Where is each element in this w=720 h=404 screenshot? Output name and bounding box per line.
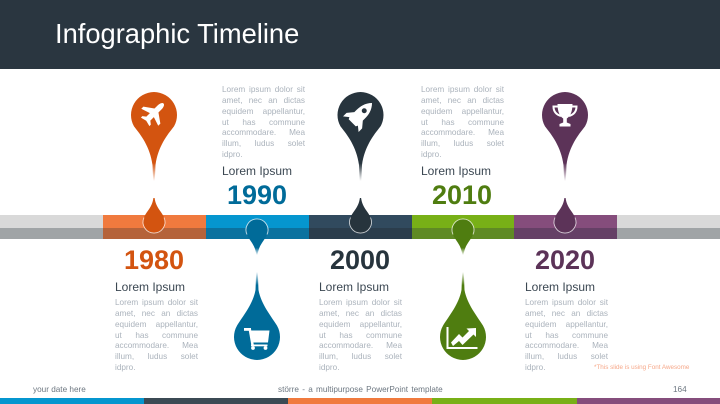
text 2010: equidem appellantur, [421, 107, 504, 116]
text 2000: illum, ludus solet [319, 352, 402, 361]
text 2010: Lorem ipsum dolor sit [421, 85, 504, 94]
text 2000: accommodare. Mea [319, 341, 402, 350]
text 2020: illum, ludus solet [525, 352, 608, 361]
icon: chart [446, 327, 478, 349]
text 1990 [222, 85, 305, 159]
header bar [0, 0, 720, 69]
footer template name: större - a multipurpose PowerPoint template [278, 385, 443, 394]
text 2010: idpro. [421, 150, 441, 159]
pin 2020: trophy [542, 92, 588, 181]
text 2010: accommodare. Mea [421, 128, 504, 137]
page number: 164 [673, 385, 687, 394]
drop 2000 on band [350, 198, 372, 233]
text 2000: amet, nec an dictas [319, 309, 402, 318]
icon: trophy [554, 104, 576, 126]
text 2010: ut has commune [421, 118, 504, 127]
heading 1990: Lorem Ipsum [222, 164, 292, 178]
text 2020: accommodare. Mea [525, 341, 608, 350]
text 2020: equidem appellantur, [525, 320, 608, 329]
pin 1990: drop with cart [234, 272, 280, 360]
year 2010: 2010 [432, 180, 492, 210]
pin 1990: small marker on band [246, 219, 268, 255]
text 1980: accommodare. Mea [115, 341, 198, 350]
year 1990: 1990 [227, 180, 287, 210]
drop 2020 on band [554, 198, 576, 233]
text 1980: idpro. [115, 363, 135, 372]
heading 2020: Lorem Ipsum [525, 280, 595, 294]
text 1990: equidem appellantur, [222, 107, 305, 116]
text 1990: idpro. [222, 150, 242, 159]
footer colour bar [0, 398, 720, 404]
text 2020: ut has commune [525, 331, 608, 340]
drop 1980 on band [143, 198, 165, 233]
icon: plane [137, 95, 172, 130]
heading 2010: Lorem Ipsum [421, 164, 491, 178]
year 2020: 2020 [535, 245, 595, 275]
icon: rocket [343, 95, 380, 132]
text 1980: ut has commune [115, 331, 198, 340]
text 2020 [525, 298, 608, 372]
text 2020: idpro. [525, 363, 545, 372]
heading 2000: Lorem Ipsum [319, 280, 389, 294]
text 1990: illum, ludus solet [222, 139, 305, 148]
text 1990: ut has commune [222, 118, 305, 127]
year 1980: 1980 [124, 245, 184, 275]
text 1980: illum, ludus solet [115, 352, 198, 361]
text 1980 [115, 298, 198, 372]
text 1990: amet, nec an dictas [222, 96, 305, 105]
timeline band [0, 215, 720, 239]
icon: cart [244, 328, 270, 350]
text 1980: amet, nec an dictas [115, 309, 198, 318]
text 2000: ut has commune [319, 331, 402, 340]
footer date: your date here [33, 385, 86, 394]
text 2000 [319, 298, 402, 372]
pin 1980: plane [131, 92, 177, 181]
text 2010: amet, nec an dictas [421, 96, 504, 105]
text 1990: Lorem ipsum dolor sit [222, 85, 305, 94]
text 2020: Lorem ipsum dolor sit [525, 298, 608, 307]
title: Infographic Timeline [55, 18, 299, 49]
text 2020: amet, nec an dictas [525, 309, 608, 318]
pin 2010: drop with chart [440, 272, 486, 360]
text 2000: equidem appellantur, [319, 320, 402, 329]
text 2000: idpro. [319, 363, 339, 372]
text 1990: accommodare. Mea [222, 128, 305, 137]
heading 1980: Lorem Ipsum [115, 280, 185, 294]
font note: *This slide is using Font Awesome [594, 364, 689, 371]
text 2010 [421, 85, 504, 159]
text 2000: Lorem ipsum dolor sit [319, 298, 402, 307]
text 2010: illum, ludus solet [421, 139, 504, 148]
pin 2010: small marker on band [452, 219, 474, 255]
year 2000: 2000 [330, 245, 390, 275]
text 1980: equidem appellantur, [115, 320, 198, 329]
pin 2000: rocket [337, 92, 384, 181]
text 1980: Lorem ipsum dolor sit [115, 298, 198, 307]
